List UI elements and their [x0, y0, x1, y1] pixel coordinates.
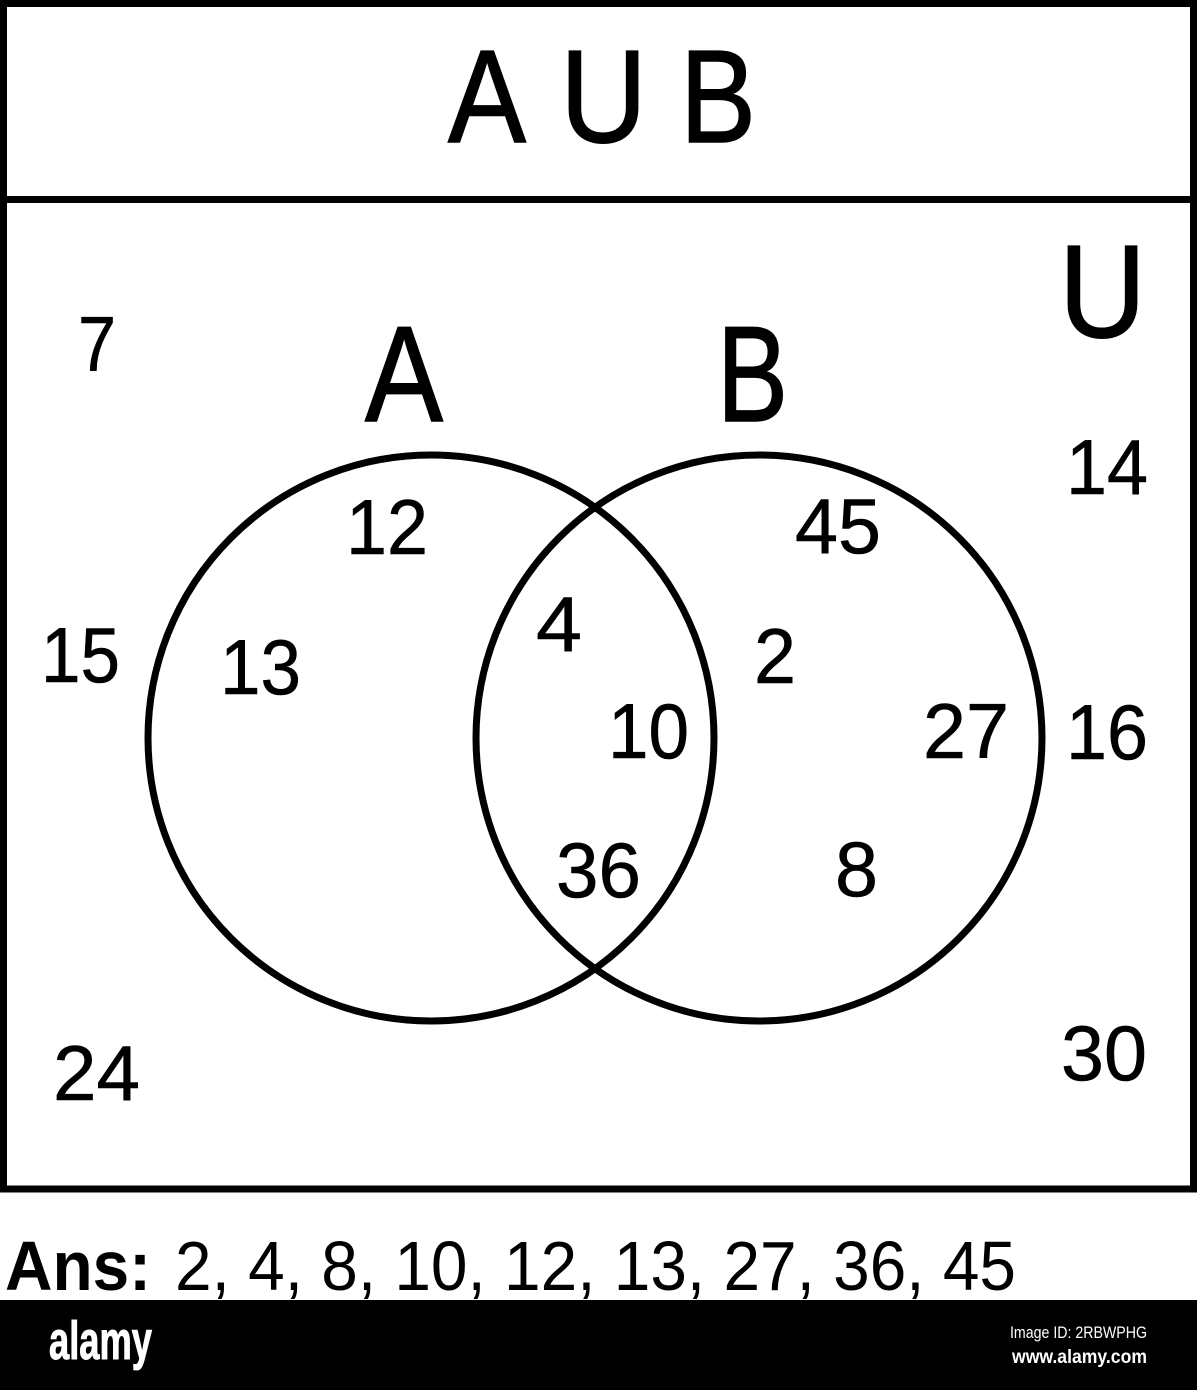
- title: B: [680, 23, 756, 170]
- numbers only in B: [754, 482, 1009, 913]
- watermark logo: alamy: [49, 1311, 152, 1371]
- number 15: 15: [41, 611, 120, 699]
- footer bar: [0, 1300, 1197, 1390]
- number 30: 30: [1061, 1009, 1147, 1097]
- number 10: 10: [608, 687, 689, 775]
- title band divider: [0, 196, 1197, 203]
- number 24: 24: [53, 1029, 140, 1117]
- title: A: [448, 23, 526, 170]
- set B label: B: [717, 298, 788, 450]
- outside numbers: [41, 300, 1148, 1117]
- universal set label: U: [1059, 218, 1146, 365]
- number 12: 12: [346, 483, 428, 571]
- circle A: [148, 455, 714, 1021]
- title: U: [560, 23, 647, 170]
- website: www.alamy.com: [1011, 1347, 1147, 1368]
- circle B: [476, 455, 1042, 1021]
- venn diagram circles: [148, 455, 1042, 1021]
- image id: Image ID: 2RBWPHG: [1010, 1323, 1147, 1342]
- number 2: 2: [754, 612, 796, 700]
- set A label: A: [365, 298, 443, 450]
- answer line: [5, 1227, 1016, 1305]
- title: [448, 23, 756, 170]
- number 45: 45: [795, 482, 881, 570]
- answer values: 2, 4, 8, 10, 12, 13, 27, 36, 45: [175, 1227, 1016, 1305]
- number 7: 7: [78, 300, 116, 388]
- number 8: 8: [835, 825, 878, 913]
- number 27: 27: [923, 687, 1009, 775]
- number 14: 14: [1066, 423, 1148, 511]
- number 36: 36: [556, 826, 641, 914]
- number 4: 4: [536, 580, 582, 668]
- number 13: 13: [220, 623, 301, 711]
- answer label: Ans:: [5, 1227, 151, 1305]
- number 16: 16: [1066, 688, 1148, 776]
- numbers only in A: [220, 483, 428, 711]
- numbers in intersection: [536, 580, 689, 914]
